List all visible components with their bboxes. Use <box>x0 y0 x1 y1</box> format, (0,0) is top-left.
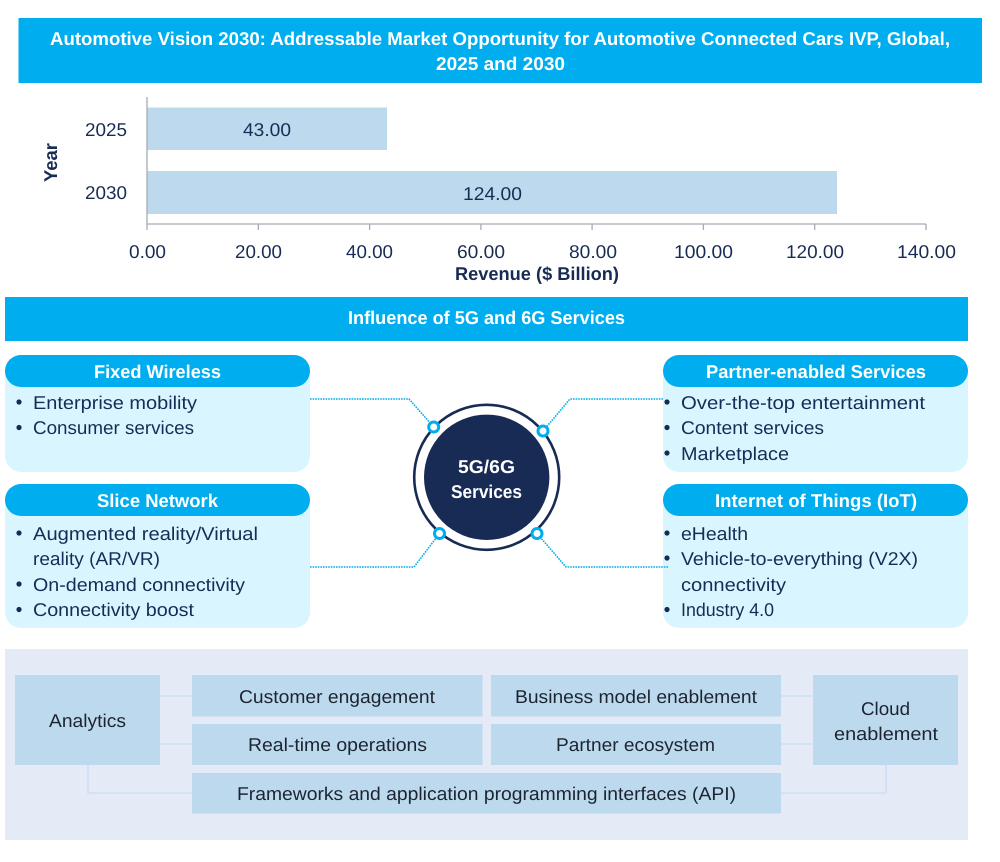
revenue axis tick labels: 140.00 <box>897 241 956 262</box>
box: cloud enablement: Cloud <box>861 698 910 719</box>
central hub: 5G/6G services: Services <box>451 481 522 502</box>
box: frameworks and API <box>192 773 781 814</box>
revenue axis title: Revenue ($ Billion) <box>455 263 619 284</box>
bar 2030: 124.00 <box>463 183 522 204</box>
panel: platform capabilities <box>5 649 968 840</box>
revenue axis tick labels: 120.00 <box>786 241 844 262</box>
section banner: influence of 5G and 6G <box>5 297 968 341</box>
revenue axis tick labels <box>129 241 956 262</box>
year axis labels: 2030 <box>85 182 127 203</box>
section banner: influence of 5G and 6G: Influence of 5G and 6G Services <box>348 307 625 328</box>
box: analytics: Analytics <box>49 710 126 731</box>
panel: slice network: reality (AR/VR) <box>33 548 160 569</box>
year axis title: Year <box>40 143 61 182</box>
box: analytics <box>15 675 160 765</box>
panel: slice network: Connectivity boost <box>33 599 194 620</box>
year axis labels: 2025 <box>85 119 127 140</box>
revenue axis tick labels: 20.00 <box>235 241 282 262</box>
dotted connectors <box>310 399 668 567</box>
panel: slice network: Augmented reality/Virtual <box>33 523 258 544</box>
panel: internet of things: Industry 4.0 <box>681 599 774 620</box>
panel: partner-enabled services <box>663 355 968 472</box>
panel: fixed wireless: Consumer services <box>33 417 194 438</box>
box: frameworks and API: Frameworks and application programming interfaces (API) <box>237 783 736 804</box>
revenue axis tick labels: 100.00 <box>674 241 733 262</box>
panel: fixed wireless: Fixed Wireless <box>94 361 221 382</box>
title banner <box>18 18 982 83</box>
panel: internet of things: eHealth <box>681 523 748 544</box>
box: cloud enablement <box>813 675 958 765</box>
panel: slice network: Slice Network <box>97 490 219 511</box>
panel: fixed wireless <box>5 355 310 472</box>
bar 2025: 43.00 <box>243 119 291 140</box>
central hub: 5G/6G services <box>414 405 559 550</box>
bar chart: revenue by year <box>40 97 956 284</box>
panel: slice network <box>5 484 310 628</box>
box: real-time operations: Real-time operations <box>248 734 427 755</box>
panel: partner-enabled services: Over-the-top entertainment <box>681 392 925 413</box>
bar 2030 <box>147 171 837 214</box>
panel: internet of things <box>663 484 968 628</box>
box: partner ecosystem: Partner ecosystem <box>556 734 715 755</box>
revenue axis tick labels: 0.00 <box>129 241 166 262</box>
title banner: Automotive Vision 2030: Addressable Market Opportunity for Automotive Connected Cars IVP, Global, <box>50 28 950 49</box>
year axis labels <box>85 119 127 203</box>
panel: partner-enabled services: Partner-enabled Services <box>706 361 926 382</box>
panel: partner-enabled services: Content services <box>681 417 824 438</box>
box: business model enablement: Business model enablement <box>515 686 757 707</box>
central hub: 5G/6G services: 5G/6G <box>458 456 515 477</box>
panel: fixed wireless: Enterprise mobility <box>33 392 198 413</box>
box: partner ecosystem <box>491 724 781 765</box>
revenue axis tick labels: 40.00 <box>346 241 393 262</box>
connector nodes <box>429 422 548 538</box>
panel: slice network: On-demand connectivity <box>33 574 246 595</box>
box: business model enablement <box>491 675 781 716</box>
bar 2025 <box>147 108 387 150</box>
revenue axis tick labels: 80.00 <box>569 241 617 262</box>
panel: internet of things: Internet of Things (IoT) <box>715 490 917 511</box>
box: cloud enablement: enablement <box>834 723 938 744</box>
revenue axis tick labels: 60.00 <box>457 241 505 262</box>
panel: partner-enabled services: Marketplace <box>681 443 789 464</box>
box: real-time operations <box>192 724 482 765</box>
panel: internet of things: Vehicle-to-everything (V2X) <box>681 548 918 569</box>
box: customer engagement <box>192 675 482 716</box>
box: customer engagement: Customer engagement <box>239 686 435 707</box>
title banner: 2025 and 2030 <box>436 53 565 74</box>
panel: internet of things: connectivity <box>681 574 787 595</box>
